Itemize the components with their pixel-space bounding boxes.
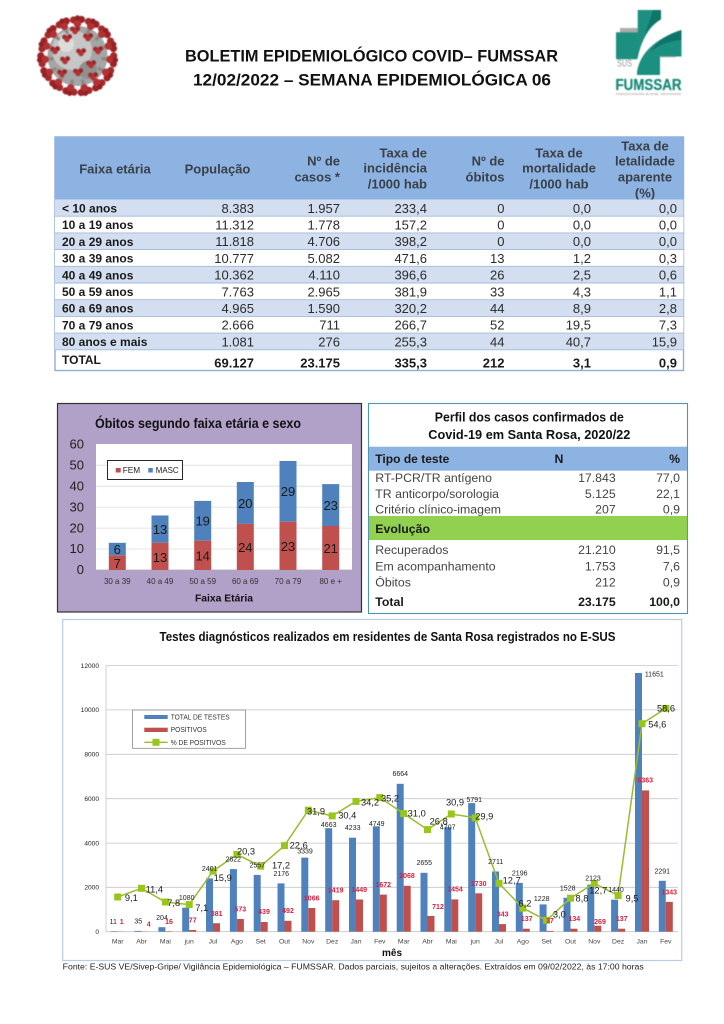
row: 60 to 69: 60 a 69 anos [62,302,134,316]
row: 10 to 19: 0 [497,218,504,232]
labels: positive tests: 573 [234,906,246,914]
labels: positive tests [120,778,677,928]
row: 40 to 49: 396,6 [394,268,427,283]
labels: positive tests: 4 [147,922,151,928]
x axis months: Nov [588,938,601,946]
rows: test types [375,471,680,516]
labels: percent positive: 30,4 [338,811,356,821]
x axis months: Mar [398,938,410,946]
row: 70 to 79: 19,5 [566,318,591,333]
row: 50 to 59: 33 [490,284,504,299]
row: under 10 [55,200,684,216]
row: 80 plus: 1.081 [221,334,254,349]
row: 30 to 39: 0,3 [659,251,677,266]
labels: total tests: 35 [134,918,142,926]
icon: FUMSSAR logo: SUS [617,58,632,70]
row: 50 to 59: 4,3 [573,284,591,299]
stacked bars: 6 [114,542,121,557]
row: 50 to 59: 2.965 [307,284,340,299]
band: outcome [369,516,687,540]
labels: total tests [110,672,670,926]
panel heading: Perfil dos casos confirmados de [435,410,624,424]
panel heading [428,410,630,442]
stacked bars [109,461,339,571]
legend [132,710,246,748]
x axis months: Jul [209,938,218,946]
labels: percent positive: 7,1 [195,903,208,913]
row: 10 to 19: 1.778 [307,218,340,232]
row: 60 to 69: 1.590 [307,301,340,316]
labels: percent positive: 17,2 [272,861,290,871]
title: 12/02/2022 – SEMANA EPIDEMIOLÓGICA 06 [193,70,551,90]
bars: total tests [111,673,666,932]
x axis labels [104,577,342,586]
labels: percent positive: 29,9 [475,812,493,822]
labels: total tests: 2123 [585,876,601,882]
labels: total tests: 2291 [655,868,670,876]
labels: percent positive: 9,1 [125,893,138,903]
labels: total tests: 4749 [369,821,385,828]
x axis months: Mar [112,938,124,946]
icon: FUMSSAR logo [616,10,682,96]
table header [55,137,684,200]
labels: total tests: 1228 [534,896,550,903]
row: 80 plus: 40,7 [566,334,591,349]
labels: percent positive: 20,3 [237,847,255,857]
grid lines and y axis: 4000 [84,840,99,847]
labels: total tests: 1440 [608,887,624,894]
rows: test types: 207 [595,502,616,516]
x axis months: Abr [422,938,434,946]
x axis months: Fev [660,938,672,946]
row: total: TOTAL [62,353,101,367]
x axis months: Abr [136,938,148,946]
labels: positive tests: 343 [497,912,509,918]
rows: test types: 5.125 [585,487,616,501]
x axis months: Out [565,938,576,946]
grid lines and y axis: 6000 [84,796,99,803]
row: 70 to 79: 52 [490,318,504,333]
row: 50 to 59: 1,1 [659,284,677,299]
row: 30 to 39: 30 a 39 anos [62,252,134,266]
y axis labels: 20 [70,520,84,536]
labels: total tests: 4233 [345,825,361,832]
icon: coronavirus [36,15,119,97]
row: 60 to 69: 44 [490,301,504,316]
rows: outcomes: 7,6 [663,559,680,573]
grid lines and y axis: 10000 [81,707,99,714]
row: 40 to 49 [55,266,684,283]
table header: Nº de [307,154,340,168]
table header: (%) [635,186,655,200]
plot area [96,444,352,570]
labels: percent positive: 31,0 [408,808,426,818]
labels: total tests: 1080 [179,895,195,902]
labels: percent positive: 54,6 [648,719,666,729]
rows: outcomes: 0,9 [663,576,680,590]
labels: total tests: 5791 [467,797,482,804]
row: 20 to 29: 0 [497,234,504,249]
table header: Taxa de [621,138,669,154]
labels: percent positive [125,703,675,919]
labels: positive tests: 16 [165,919,173,926]
row: 10 to 19 [55,216,684,233]
row: 60 to 69 [55,300,684,316]
y axis labels [70,436,84,577]
stacked bars: 23 [281,539,295,554]
labels: positive tests: 137 [521,916,533,923]
row: 60 to 69: 2,8 [659,301,677,316]
stacked bars: 13 [153,522,167,537]
x axis labels: 70 a 79 [275,577,302,586]
labels: total tests: 4707 [440,824,456,832]
rows: outcomes: Óbitos [375,575,411,590]
row: 20 to 29: 398,2 [394,234,427,249]
labels: total tests: 2196 [512,870,528,878]
labels: positive tests: 1 [120,919,124,926]
row: 70 to 79: 266,7 [394,318,427,333]
row: 80 plus: 15,9 [652,334,677,349]
chart title: Testes diagnósticos realizados em residentes de Santa Rosa registrados no E-SUS [160,629,616,644]
stacked bars: 7 [114,556,121,571]
row: 10 to 19: 0,0 [659,218,677,232]
table header: mortalidade [522,160,596,176]
y axis labels: 60 [70,436,84,452]
row: 10 to 19: 10 a 19 anos [62,218,134,232]
row: 10 to 19: 157,2 [394,218,427,232]
rows: test types: 0,9 [663,502,680,516]
table header: Nº de [472,154,504,168]
row: 40 to 49: 26 [490,268,504,283]
labels: positive tests: 1419 [328,888,344,894]
y axis labels: 10 [70,541,84,556]
row: 30 to 39: 1,2 [573,251,591,266]
row: 20 to 29: 20 a 29 anos [62,235,134,249]
x axis labels: 40 a 49 [147,577,174,586]
labels: total tests: 1528 [560,886,576,892]
row: 10 to 19: 11.312 [215,218,254,232]
icon: FUMSSAR logo: FUMSSAR [616,77,682,94]
stacked bars: 24 [238,540,253,555]
row: 60 to 69: 320,2 [394,301,427,316]
row: under 10: 0,0 [659,201,677,216]
row: under 10: 0 [497,201,504,216]
labels: total tests: 2557 [250,862,265,870]
y axis labels: 50 [70,458,84,472]
row: 70 to 79: 70 a 79 anos [62,318,134,332]
legend [108,460,182,480]
row: 70 to 79: 7,3 [659,318,677,333]
labels: positive tests: 1672 [376,882,391,889]
labels: total tests: 6664 [393,771,408,778]
chart title: Óbitos segundo faixa etária e sexo [95,414,301,431]
stacked bars: 20 [238,496,253,511]
row: 10 to 19: 0,0 [573,218,591,232]
band: outcome: Evolução [375,522,430,536]
table header: Taxa de [535,146,583,160]
grid lines and y axis: 12000 [81,663,99,670]
panel: diagnostic tests chart [63,620,682,960]
labels: percent positive: 15,9 [214,873,232,883]
title: BOLETIM EPIDEMIOLÓGICO COVID– FUMSSAR [185,46,558,66]
labels: positive tests: 1343 [662,890,677,896]
row: total: 23.175 [300,356,340,370]
x axis title: mês [382,947,402,959]
row: 50 to 59: 50 a 59 anos [62,285,134,299]
labels: percent positive: 7,8 [167,898,180,908]
x axis months: jun [184,938,194,946]
labels: total tests: 4663 [321,822,337,829]
labels: percent positive: 3,0 [553,909,566,919]
x axis months [112,938,672,946]
x axis months: Dez [326,938,339,946]
row: 30 to 39: 10.777 [214,251,254,266]
legend: MASC [156,465,179,475]
rows: outcomes: 1.753 [585,559,616,573]
stacked bars: 14 [195,548,210,564]
row: 70 to 79: 2.666 [221,318,254,333]
rows: outcomes: 21.210 [578,543,616,557]
table header: aparente [618,170,672,184]
labels: positive tests: 381 [211,911,223,918]
grid lines and y axis [81,663,678,936]
row: 60 to 69: 4.965 [221,301,254,316]
row: 30 to 39: 13 [490,251,504,266]
grid lines and y axis: 0 [95,929,99,936]
table header: /1000 hab [529,176,589,192]
row: 40 to 49: 2,5 [573,268,591,283]
labels: total tests: 2655 [417,860,432,867]
stacked bars: 23 [323,498,338,513]
labels: percent positive: 12,7 [503,875,521,885]
labels: positive tests: 2068 [399,873,415,880]
labels: percent positive: 8,8 [576,894,588,904]
x axis months: Set [256,938,266,946]
table header: letalidade [615,154,675,168]
rows: test types: Critério clínico-imagem [375,502,501,516]
labels: total tests: 11651 [645,672,664,678]
labels: total tests: 2822 [226,856,241,864]
x axis labels: 60 a 69 [232,577,259,586]
table header: incidência [363,160,428,176]
row: 30 to 39: 5.082 [307,251,340,266]
y axis labels: 0 [77,562,84,577]
row: under 10: 1.957 [307,201,340,216]
legend: % DE POSITIVOS [171,738,226,747]
legend: POSITIVOS [171,725,207,734]
row: total: 335,3 [394,356,427,370]
row: 20 to 29: 4.706 [307,234,340,249]
labels: positive tests: 492 [282,908,294,915]
x axis labels: 30 a 39 [104,577,131,586]
labels: positive tests: 1449 [352,887,367,894]
row: 20 to 29 [55,233,684,250]
labels: positive tests: 1454 [447,886,463,894]
row: 40 to 49: 10.362 [214,268,254,283]
row: 20 to 29: 11.818 [215,234,254,249]
y axis labels: 40 [70,478,84,494]
row: 60 to 69: 8,9 [573,301,591,316]
labels: positive tests: 439 [258,909,270,916]
row: 20 to 29: 0,0 [659,234,677,249]
rows: outcomes: 91,5 [656,543,680,557]
row: 70 to 79: 711 [319,318,340,333]
panel: confirmed case profile [368,404,688,614]
panel heading: Covid-19 em Santa Rosa, 2020/22 [428,428,630,442]
row: total [375,595,680,609]
band: test type: N [555,452,564,466]
x axis months: Mai [446,938,457,946]
row: under 10: < 10 anos [62,202,117,216]
row: total: 0,9 [659,356,677,370]
row: 80 plus: 255,3 [394,334,427,349]
labels: total tests: 204 [156,915,168,922]
table header: Taxa de [380,146,427,160]
row: 80 plus: 44 [490,334,504,349]
labels: positive tests: 1730 [471,881,487,888]
grid lines and y axis: 8000 [84,752,99,758]
rows: test types: 17.843 [578,471,616,485]
rows: test types: 22,1 [656,487,680,501]
table header: casos * [294,170,341,184]
y axis labels: 30 [70,500,84,514]
row: 50 to 59: 7.763 [221,284,254,299]
labels: percent positive: 35,2 [381,794,399,804]
band: test type: % [669,452,680,466]
labels: total tests: 2176 [274,871,289,878]
x axis months: Dez [612,938,625,946]
legend: TOTAL DE TESTES [171,712,230,722]
labels: positive tests: 37 [546,918,554,925]
bars: positive tests [118,790,673,932]
x axis months: Set [541,938,552,946]
stacked bars: 13 [153,550,167,565]
row: 40 to 49: 40 a 49 anos [62,268,134,282]
row: 30 to 39 [55,250,684,266]
row: 20 to 29: 0,0 [573,234,591,249]
row: total: Total [375,595,404,609]
labels: positive tests: 77 [189,918,197,924]
row: 40 to 49: 0,6 [659,268,677,283]
row: total: 212 [483,356,504,370]
x axis months: Ago [231,938,243,946]
rows: outcomes: 212 [595,576,616,590]
title [185,46,558,90]
labels: percent positive: 6,2 [519,898,531,908]
labels: positive tests: 137 [616,916,628,923]
x axis months: Jan [637,938,648,946]
row: total: 100,0 [649,595,680,609]
x axis months: Out [279,938,290,946]
source note: Fonte: E-SUS VE/Sivep-Gripe/ Vigilância Epidemiológica – FUMSSAR. Dados parciais, sujeitos a alterações. Extraídos em 09/02/2022, às 17:00 horas [63,962,644,972]
row: total: 3,1 [573,356,591,370]
rows: outcomes [375,543,680,590]
labels: percent positive: 26,8 [430,816,448,826]
rows: outcomes: Recuperados [375,543,448,557]
x axis labels: 80 e + [319,577,342,586]
labels: positive tests: 269 [594,919,606,926]
x axis labels: 50 a 59 [189,577,217,586]
grid lines and y axis: 2000 [84,885,99,892]
x axis months: Jan [351,938,362,946]
x axis months: jun [470,938,480,946]
stacked bars: 21 [323,541,338,556]
legend: FEM [123,465,140,475]
x axis months: Mai [160,938,171,946]
row: 40 to 49: 4.110 [308,268,340,283]
x axis months: Ago [517,938,529,946]
panel: deaths by age and sex chart [58,404,362,612]
row: under 10: 233,4 [394,201,427,216]
row: under 10: 0,0 [573,201,591,216]
row: total [62,353,677,370]
band: test type [369,447,687,471]
row: under 10: 8.383 [221,201,254,216]
labels: percent positive: 9,5 [626,894,638,904]
rows: test types: 77,0 [656,471,680,485]
row: 80 plus [55,333,684,350]
x axis months: Nov [302,938,315,946]
panel: age group table [55,137,684,370]
labels: total tests: 2401 [202,866,218,873]
band: test type: Tipo de teste [375,452,449,466]
labels: percent positive: 11,4 [146,884,163,894]
labels: percent positive: 31,9 [307,806,325,816]
row: total: 69.127 [214,356,254,370]
rows: test types: RT-PCR/TR antígeno [375,471,492,485]
rows: outcomes: Em acompanhamento [375,559,496,573]
row: 70 to 79 [55,316,684,333]
row: 80 plus: 80 anos e mais [62,335,148,349]
icon: FUMSSAR logo: FUNDAÇÃO MUNICIPAL DE SAÚDE - SANTA ROSA/RS [616,91,681,96]
row: 80 plus: 276 [318,334,340,349]
labels: percent positive: 58,6 [657,703,675,713]
row: 50 to 59 [55,283,684,300]
line: percent positive [114,705,669,924]
stacked bars: 29 [281,484,295,499]
labels: percent positive: 22,6 [290,840,308,850]
stacked bars: 19 [195,514,210,528]
x axis months: Jul [495,938,504,946]
rows: test types: TR anticorpo/sorologia [375,487,499,501]
labels: total tests: 2711 [488,859,503,866]
x axis months: Fev [374,938,386,946]
labels: percent positive: 12,7 [589,885,607,895]
labels: percent positive: 30,9 [446,798,464,808]
labels: positive tests: 6363 [638,778,653,784]
row: 30 to 39: 471,6 [394,251,427,266]
labels: positive tests: 134 [568,916,580,923]
labels: total tests: 11 [110,919,117,926]
table header: População [185,162,250,176]
table header: óbitos [466,170,504,184]
row: 50 to 59: 381,9 [394,284,427,299]
x axis title: Faixa Etária [195,592,253,604]
labels: percent positive: 34,2 [361,798,379,808]
labels: positive tests: 712 [432,904,444,911]
labels: total tests: 3339 [297,848,313,856]
table header: /1000 hab [368,176,427,192]
row: total: 23.175 [578,595,616,609]
labels: positive tests: 1066 [304,896,320,902]
table header: Faixa etária [79,162,152,176]
